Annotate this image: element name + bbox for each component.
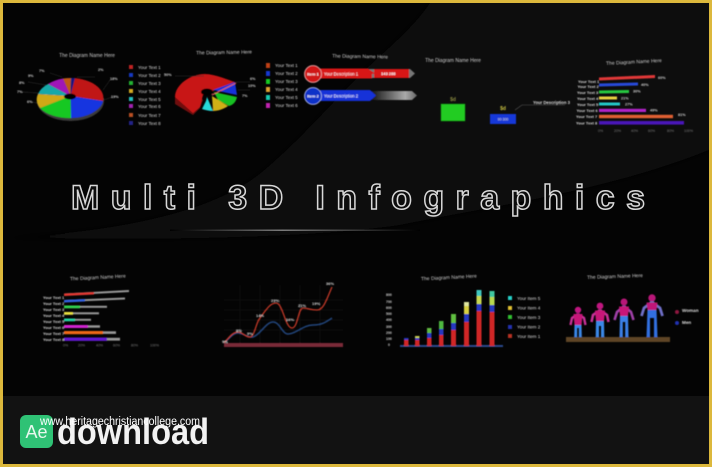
chart base [224,343,343,347]
horizontal bar chart: top right: 40% [631,129,638,133]
horizontal bar chart: top right: Your Text 6 [576,108,598,113]
pie chart 1: 7% [17,90,23,94]
legend: pie 2: Your Text 4 [275,87,298,92]
horizontal bar chart: bottom left: Your Text 5 [43,319,65,324]
axis labels: 100 [386,337,392,341]
pie chart 1: 19% [111,95,119,99]
axis labels: 0 [388,343,390,347]
footer bar [3,396,709,464]
horizontal bar chart: top right: 60% [648,129,655,133]
horizontal bar chart: bottom left: 40% [96,344,103,348]
blue box [490,114,516,124]
horizontal bar chart: bottom left: 100% [150,344,159,348]
horizontal bar chart: top right: 49% [650,108,658,112]
Ae logo badge: Ae [25,422,48,442]
title: pie 1: The Diagram Name Here [59,53,115,59]
horizontal bar chart: bottom left: Your Text 3 [43,307,65,312]
horizontal bar chart: top right: Your Text 1 [578,79,600,84]
person 1 [570,307,586,337]
pie chart 2: 50% [164,73,172,77]
platform [566,337,670,342]
horizontal bar chart: top right [576,58,693,133]
horizontal bar chart: bottom left: Your Text 6 [43,325,65,330]
axis labels: 700 [386,300,392,304]
title: pie 2: The Diagram Name Here [196,50,252,56]
legend: stacked bars: Your Item 5 [517,296,541,301]
pie chart 1: 2% [98,68,104,72]
legend: stacked bars: Your Item 1 [517,334,541,339]
line chart: 36% [326,281,334,286]
person 2 [592,303,608,337]
legend: pie 1: Your Text 8 [138,121,161,126]
pie chart 1 [17,53,119,121]
legend: people: Men [682,320,691,325]
arrow: item 1: Your Description 1 [324,72,359,76]
horizontal bar chart: top right: 100% [684,129,693,133]
arrow chart [304,54,417,104]
pie chart 1: 7% [39,69,45,73]
horizontal bar chart: top right: 80% [667,129,674,133]
watermark url: www.heritagechristiancollege.com [39,416,200,428]
main title: Multi 3D Infographics [71,179,645,217]
horizontal bar chart: bottom left: Your Text 4 [43,313,65,318]
pie chart 2: 6% [250,77,256,81]
pie chart 1: 9% [28,74,34,78]
title: box diagram: The Diagram Name Here [425,58,481,64]
arrow: item 1: Item 1 [307,72,320,76]
horizontal bar chart: top right: 60% [658,76,666,80]
horizontal bar chart: bottom left: 0% [63,344,68,348]
title: people chart: The Diagram Name Here [587,273,643,281]
legend: pie 1: Your Text 5 [138,97,161,102]
download wordmark: download [57,411,209,452]
horizontal bar chart: bottom left: Your Text 8 [43,337,65,342]
horizontal bar chart: top right: 27% [625,102,633,106]
title: bar chart top right: The Diagram Name Here [606,58,662,67]
title: bar chart bottom left: The Diagram Name Here [70,274,126,282]
pie chart 2 [164,50,256,115]
arrow: item 1 [304,66,415,82]
legend: pie 1: Your Text 6 [138,104,161,109]
horizontal bar chart: bottom left: Your Text 1 [43,295,65,300]
horizontal bar chart: bottom left: Your Text 7 [43,331,65,336]
horizontal bar chart: top right: 21% [621,96,629,100]
pie chart 2: 7% [242,94,248,98]
horizontal bar chart: bottom left [43,274,159,348]
legend: pie 1 [129,65,161,126]
horizontal bar chart: top right: Your Text 2 [578,84,599,89]
horizontal bar chart: bottom left: 80% [131,344,138,348]
box diagram: 90 300 [498,118,508,122]
horizontal bar chart: top right: Your Text 4 [577,96,599,101]
arrow: item 1: 143 288 [381,71,396,76]
horizontal bar chart: top right: Your Text 3 [577,90,599,95]
line chart: 9% [247,331,253,336]
axis labels: 400 [386,318,392,322]
arrow: item 2: Your Description 2 [324,94,359,98]
title: arrow chart: The Diagram Name Here [332,54,388,60]
legend: pie 2: Your Text 1 [275,63,298,68]
connector line [515,105,565,110]
horizontal bar chart: top right: Your Text 8 [576,120,598,126]
box diagram [425,58,571,124]
line chart [222,281,343,347]
line chart: 16% [286,317,294,322]
box diagram: $d [450,97,456,103]
legend: people [675,308,699,325]
legend: people: Woman [682,308,699,313]
legend: pie 2: Your Text 5 [275,95,298,100]
line chart: 9% [222,339,228,344]
horizontal bar chart: top right: Your Text 5 [577,102,599,107]
horizontal bar chart: top right: 20% [614,129,621,133]
background swoosh [3,3,709,239]
legend: stacked bars: Your Item 3 [517,315,541,320]
person 4 [642,294,662,337]
horizontal bar chart: top right: 30% [633,90,641,94]
legend: pie 1: Your Text 1 [138,65,161,70]
arrow: item 2 [304,88,417,104]
pie chart 1: 6% [27,100,33,104]
horizontal bar chart: top right: 40% [641,83,649,87]
legend: pie 2 [266,63,298,108]
legend: pie 1: Your Text 7 [138,113,161,118]
pie chart 1: 8% [19,81,25,85]
pie chart 1: 18% [110,77,118,81]
legend: stacked bars [508,296,541,339]
line chart: 23% [271,298,279,303]
line chart: 8% [236,328,242,333]
title: stacked bar chart: The Diagram Name Here [421,274,477,282]
title rule [170,230,420,231]
line: red series [224,287,332,343]
axis labels: 600 [386,306,392,310]
axis labels: 800 [386,293,392,297]
green box [441,104,465,121]
pie chart 2: 10% [248,84,256,88]
horizontal bar chart: top right: 81% [678,113,686,117]
box diagram: $d [500,106,506,112]
horizontal bar chart: bottom left: 20% [78,344,85,348]
horizontal bar chart: top right: Your Text 7 [576,114,598,119]
legend: pie 2: Your Text 6 [275,103,298,108]
line chart: 19% [312,301,320,306]
line chart: 21% [298,303,306,308]
line chart: 14% [256,313,264,318]
arrow: item 2: Item 2 [307,94,320,98]
legend: stacked bars: Your Item 2 [517,324,541,330]
line: blue series [224,318,332,343]
person 3 [614,298,634,337]
stacked bar chart [386,274,541,347]
legend: pie 2: Your Text 2 [275,71,298,76]
legend: pie 1: Your Text 2 [138,73,161,78]
horizontal bar chart: bottom left: 60% [113,344,120,348]
people chart [566,273,699,342]
legend: pie 2: Your Text 3 [275,79,298,84]
horizontal bar chart: bottom left: Your Text 2 [43,301,65,306]
legend: pie 1: Your Text 4 [138,89,161,94]
axis labels: 300 [386,325,392,329]
legend: stacked bars: Your Item 4 [517,306,541,310]
box diagram: Your Description 3 [533,100,571,105]
Ae logo badge [20,415,53,448]
stacks [404,290,494,346]
legend: pie 1: Your Text 3 [138,81,161,86]
axis labels: 500 [386,312,392,316]
horizontal bar chart: top right: 0% [598,129,603,133]
axis labels: 200 [386,331,392,335]
